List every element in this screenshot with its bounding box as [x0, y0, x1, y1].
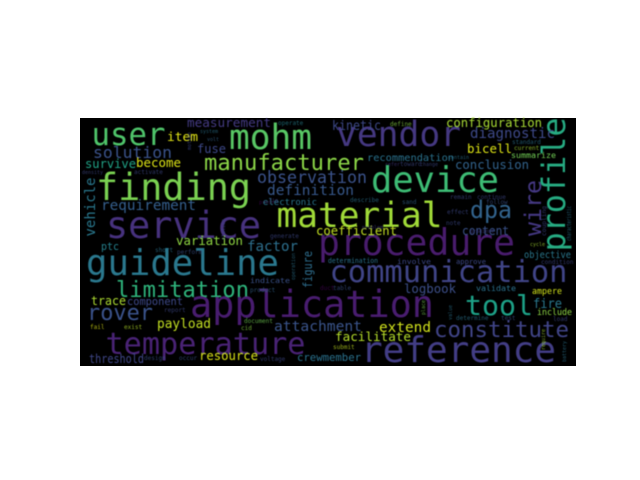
small words	[82, 120, 574, 363]
medium words: indicate	[250, 277, 290, 285]
word: temperature: temperature	[106, 327, 306, 362]
word: guideline: guideline	[86, 243, 279, 284]
medium words: extend	[379, 320, 431, 336]
word: mohm: mohm	[229, 118, 312, 158]
small words: determine	[456, 315, 489, 322]
small words: operate	[278, 120, 304, 127]
small words: test	[501, 315, 516, 322]
medium words: solution	[93, 143, 172, 162]
small words: station	[221, 219, 227, 240]
small words: effect	[447, 209, 469, 216]
small words: submit	[333, 344, 355, 351]
medium words: coefficient	[316, 224, 397, 238]
medium words: summarize	[511, 151, 557, 160]
small words: battery	[562, 341, 568, 362]
small words: system	[200, 129, 218, 135]
small words: duct	[320, 285, 335, 292]
medium words: payload	[157, 317, 211, 332]
small words: standard	[512, 139, 541, 146]
word: reference: reference	[361, 330, 556, 371]
small words: voltage	[260, 356, 286, 363]
medium words: trace	[91, 294, 126, 308]
medium words	[83, 116, 572, 366]
word: tool: tool	[465, 289, 533, 322]
small words: load	[553, 316, 568, 323]
medium words: become	[136, 156, 181, 170]
small words: press	[259, 200, 274, 206]
small words: cid	[241, 325, 252, 332]
word: wire: wire	[521, 180, 547, 236]
small words: volt	[207, 137, 219, 143]
word cloud panel background	[80, 118, 576, 366]
small words: value	[448, 305, 454, 320]
medium words: measurement	[187, 116, 271, 130]
small words: operation	[291, 253, 297, 280]
medium words: conclusion	[455, 158, 529, 172]
medium words: fire	[533, 297, 562, 312]
medium words: validate	[476, 284, 516, 293]
medium words: configuration	[446, 116, 542, 130]
medium words: ampere	[532, 287, 562, 297]
small words: exist	[124, 324, 142, 331]
small words: current	[514, 145, 540, 152]
small words: design	[144, 355, 166, 362]
medium words: threshold	[89, 352, 144, 366]
small words: short	[155, 247, 173, 254]
word: profile: profile	[535, 118, 573, 252]
small words: toward	[400, 161, 422, 168]
word: communication: communication	[330, 255, 568, 290]
medium words: objective	[524, 250, 571, 261]
word: user: user	[92, 117, 166, 153]
small words: occur	[179, 355, 197, 362]
medium words: resource	[199, 349, 258, 363]
medium words: involve	[397, 258, 431, 266]
small words: refer	[385, 162, 400, 168]
small words: contain	[448, 155, 469, 161]
small words: report	[164, 307, 186, 314]
word: limitation: limitation	[116, 278, 249, 303]
medium words: survive	[85, 157, 136, 171]
medium words: crewmember	[297, 351, 361, 364]
small words: note	[446, 220, 461, 227]
small words: product	[250, 287, 276, 294]
word: manufacturer: manufacturer	[204, 151, 364, 176]
small words: change	[420, 162, 438, 168]
small words: fig	[269, 198, 278, 204]
small words: motion	[187, 132, 193, 150]
small words: characteristic	[566, 206, 573, 241]
medium words: logbook	[404, 282, 457, 296]
medium words: recommendation	[367, 153, 454, 164]
small words: activate	[134, 169, 163, 176]
small words: table	[333, 285, 351, 292]
medium words: observation	[257, 168, 367, 187]
word: vendor: vendor	[336, 115, 461, 155]
medium words: component	[127, 295, 183, 308]
medium words: determination	[328, 257, 378, 265]
medium words: ptc	[101, 240, 119, 253]
small words: document	[244, 318, 273, 325]
medium words: include	[537, 308, 572, 318]
word: material: material	[276, 196, 442, 236]
medium words: kinetic	[332, 119, 381, 134]
small words: problem	[362, 225, 383, 231]
medium words: bicell	[467, 142, 512, 156]
small words: gradient	[470, 229, 494, 235]
word: constitute: constitute	[434, 317, 569, 343]
small words: follow	[486, 199, 508, 206]
word: application: application	[190, 283, 434, 326]
small words: require	[541, 329, 547, 350]
small words: perform	[177, 249, 203, 256]
medium words: vehicle	[83, 178, 99, 236]
medium words: approve	[456, 258, 486, 266]
word: procedure: procedure	[318, 221, 515, 264]
small words: sand	[402, 199, 417, 206]
medium words: figure	[301, 251, 315, 288]
medium words: diagnostic	[470, 126, 555, 142]
medium words: item	[167, 130, 198, 144]
word: rover: rover	[87, 301, 153, 326]
small words: cycle	[530, 242, 545, 248]
medium words: definition	[267, 183, 354, 199]
small words: generate	[270, 233, 299, 240]
medium words: facilitate	[335, 329, 411, 344]
small words: remain	[450, 194, 472, 201]
medium words: factor	[247, 239, 298, 255]
small words: continue	[477, 194, 506, 201]
medium words: electronic	[263, 198, 317, 208]
medium words: content	[462, 224, 509, 238]
small words: describe	[350, 197, 379, 204]
word: service: service	[106, 204, 261, 247]
word: dpa: dpa	[470, 196, 512, 224]
medium words: fuse	[197, 142, 226, 156]
small words: condition	[541, 259, 574, 266]
medium words: attachment	[274, 319, 362, 335]
small words: density	[82, 170, 103, 176]
medium words: requirement	[101, 198, 196, 214]
medium words: variation	[176, 234, 243, 248]
small words: coupling	[541, 206, 548, 236]
small words: place	[421, 300, 427, 315]
small words: define	[390, 121, 412, 128]
word: device: device	[371, 160, 499, 201]
word: finding: finding	[96, 166, 251, 209]
word cloud	[82, 115, 574, 371]
small words: fail	[90, 324, 105, 331]
